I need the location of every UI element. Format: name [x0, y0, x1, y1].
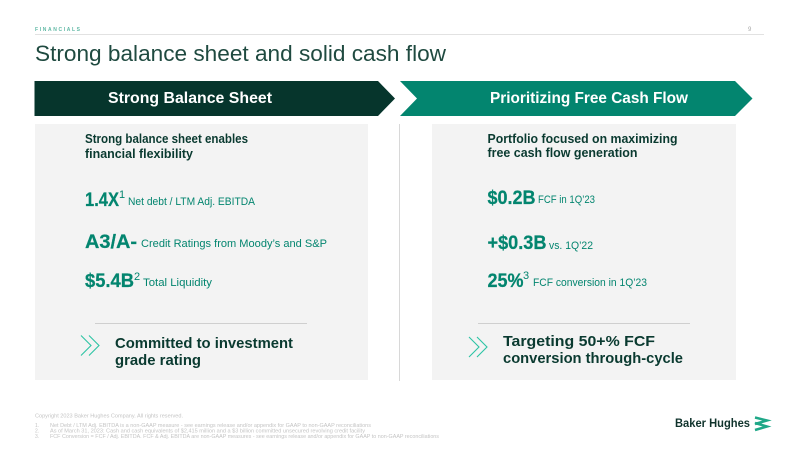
footnotes: 2. [35, 428, 39, 434]
panel heading: free cash flow generation [488, 146, 638, 160]
metric: FCF conversion: 25% [488, 271, 524, 292]
metric: FCF [488, 188, 595, 209]
left arrow banner: Strong Balance Sheet [108, 90, 273, 107]
metric: versus prior year [488, 233, 593, 254]
footnotes [35, 414, 440, 440]
panel heading [488, 132, 678, 160]
footnotes: Copyright 2023 Baker Hughes Company. All rights reserved. [35, 414, 183, 420]
metric: total liquidity: Total Liquidity [143, 277, 213, 289]
panel heading: financial flexibility [85, 147, 193, 161]
metric: net debt: 1.4X [85, 190, 119, 211]
logo: Baker Hughes: Baker Hughes [675, 418, 750, 430]
metric: versus prior year: vs. 1Q’22 [549, 240, 593, 252]
icon: logo mark [755, 418, 767, 430]
left arrow banner [34, 81, 395, 116]
metric: credit ratings: A3/A- [85, 232, 137, 253]
title: Strong balance sheet and solid cash flow [35, 41, 446, 66]
metric: total liquidity: $5.4B [85, 271, 134, 292]
metric: total liquidity: 2 [134, 271, 140, 283]
metric: FCF: FCF in 1Q’23 [538, 194, 595, 206]
panel heading: Strong balance sheet enables [85, 132, 248, 146]
footnotes: 3. [35, 434, 39, 440]
metric: versus prior year: +$0.3B [488, 233, 546, 254]
metric: total liquidity [85, 271, 213, 292]
panel: strong balance sheet [35, 124, 368, 380]
footnotes: FCF Conversion = FCF / Adj. EBITDA. FCF & Adj. EBITDA are non-GAAP measures - see earnings release and/or appendix for GAAP to non-GAAP reconciliations [50, 434, 440, 440]
callout: conversion through-cycle [503, 350, 683, 367]
callout [115, 335, 293, 369]
metric: net debt: 1 [119, 189, 125, 201]
callout: Targeting 50+% FCF [503, 333, 655, 350]
footnotes: Net Debt / LTM Adj. EBITDA is a non-GAAP measure - see earnings release and/or appendix for GAAP to non-GAAP reconciliations [50, 423, 372, 429]
icon: double chevron [469, 337, 487, 357]
panel heading: Portfolio focused on maximizing [488, 132, 678, 146]
metric: net debt [85, 189, 256, 211]
icon: double chevron [81, 336, 99, 356]
footnotes: 1. [35, 423, 39, 429]
panel: free cash flow [432, 124, 736, 380]
metric: credit ratings: Credit Ratings from Moody’s and S&P [141, 238, 327, 250]
section label: FINANCIALS [35, 27, 81, 33]
right arrow banner [400, 81, 752, 116]
metric: FCF: $0.2B [488, 188, 536, 209]
page number: 9 [748, 27, 752, 33]
metric: FCF conversion: FCF conversion in 1Q’23 [533, 277, 647, 289]
metric: FCF conversion: 3 [523, 270, 529, 282]
right arrow banner: Prioritizing Free Cash Flow [490, 90, 689, 107]
footnotes: As of March 31, 2023: Cash and cash equivalents of $2,415 million and a $3 billion committed unsecured revolving credit facility [50, 428, 366, 434]
callout: Committed to investment [115, 335, 293, 352]
callout: grade rating [115, 352, 201, 369]
metric: net debt: Net debt / LTM Adj. EBITDA [128, 196, 256, 208]
callout [503, 333, 683, 367]
metric: credit ratings [85, 232, 327, 253]
metric: FCF conversion [488, 270, 647, 292]
panel heading [85, 132, 248, 161]
